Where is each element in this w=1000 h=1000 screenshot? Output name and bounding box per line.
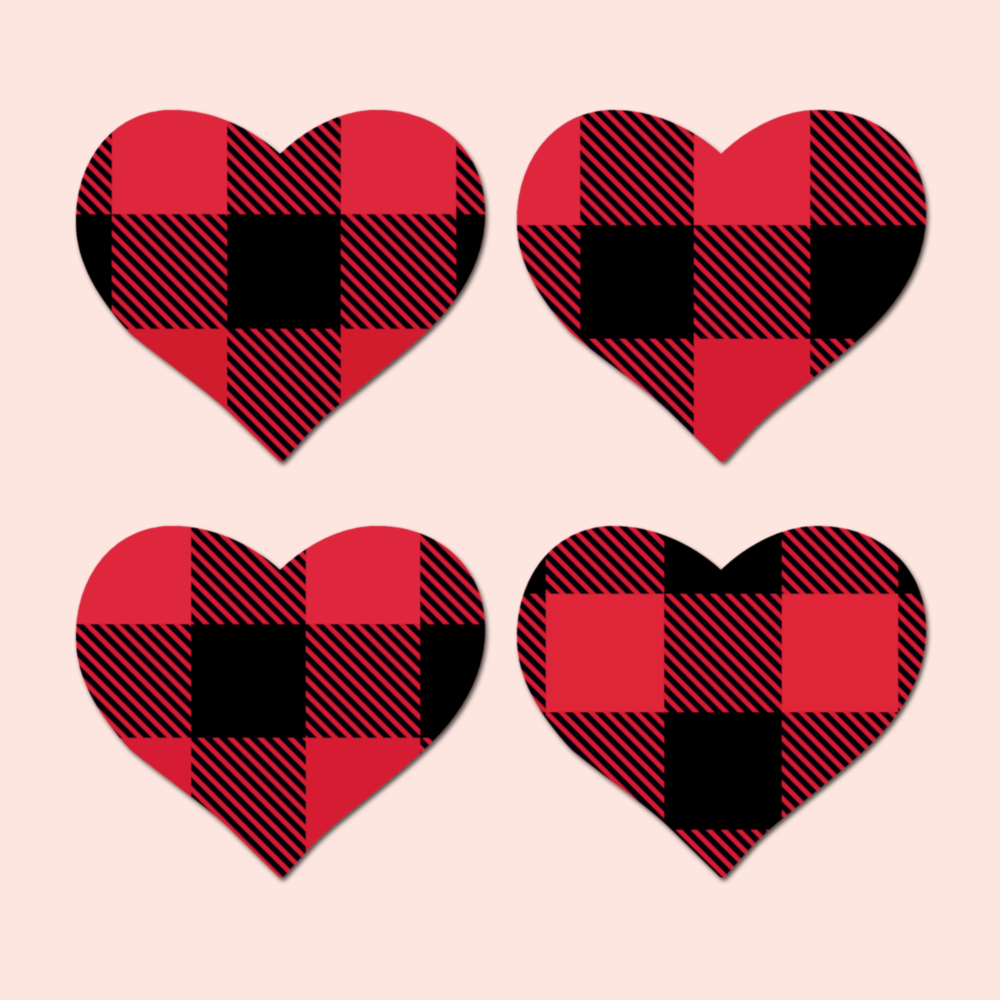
heart: top left plaid (74, 109, 490, 468)
heart: top right plaid (516, 109, 932, 468)
heart: bottom left plaid (74, 525, 490, 884)
heart: bottom right plaid (516, 525, 932, 884)
